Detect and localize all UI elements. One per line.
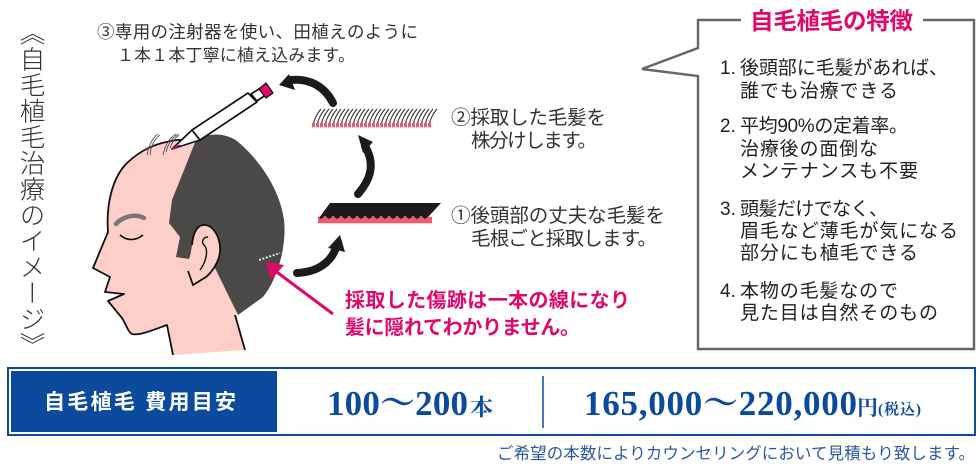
footnote: ご希望の本数によりカウンセリングにおいて見積もり致します。	[497, 444, 975, 463]
price: 165,000～220,000	[584, 384, 857, 423]
feature 1: 後頭部に毛髪があれば、	[740, 57, 948, 79]
feature 4: 見た目は自然そのもの	[740, 302, 938, 324]
features heading: 自毛植毛の特徴	[750, 8, 914, 34]
feature 3: 眉毛など薄毛が気になる	[740, 220, 958, 242]
step 1 text	[451, 205, 665, 250]
pink callout	[345, 289, 630, 339]
hair	[169, 134, 285, 315]
skin	[93, 138, 245, 355]
feature 2: 治療後の面倒な	[740, 138, 878, 160]
step 2 text	[451, 107, 606, 152]
arrow: strip to grafts	[358, 135, 373, 194]
feature 3: 部分にも植毛できる	[740, 242, 918, 264]
vertical title: 《自毛植毛治療のイメージ》	[16, 20, 44, 358]
feature 2: メンテナンスも不要	[740, 161, 918, 182]
panel: cost bar	[8, 368, 975, 435]
pink callout: 採取した傷跡は一本の線になり	[345, 289, 630, 312]
panel: features speech bubble	[642, 8, 974, 349]
arrow: scalp to strip	[297, 235, 345, 273]
step 3 text: ③専用の注射器を使い、田植えのように	[97, 22, 418, 42]
hair graft row: harvested strip	[318, 203, 441, 220]
step 1 text: ①後頭部の丈夫な毛髪を	[451, 205, 665, 227]
price: (税込)	[878, 401, 921, 418]
feature 2	[720, 115, 918, 182]
feature 4	[720, 280, 938, 324]
feature 1: 誰でも治療できる	[740, 80, 898, 102]
cost label: 自毛植毛 費用目安	[44, 391, 236, 414]
feature 4: 本物の毛髪なので	[740, 280, 898, 302]
eyebrow	[116, 216, 144, 224]
hair graft row: separated	[312, 109, 437, 125]
step 3 text: １本１本丁寧に植え込みます。	[117, 46, 355, 65]
feature 3: 3.	[720, 199, 736, 220]
step 3 text	[97, 22, 418, 65]
ear	[188, 225, 220, 285]
thin hair strands	[147, 134, 179, 155]
feature 2: 2.	[720, 116, 736, 137]
feature 3: 頭髪だけでなく、	[740, 198, 888, 220]
face outline	[93, 139, 245, 355]
feature 2: 平均90%の定着率。	[740, 115, 908, 137]
cost label	[11, 371, 277, 432]
feature 3	[720, 198, 958, 264]
illustration: head profile	[93, 134, 285, 355]
hair count: 100～200	[327, 384, 468, 423]
feature 1	[720, 57, 948, 102]
arrow: pink pointer to scar	[266, 262, 333, 314]
arrow: grafts to syringe	[279, 74, 333, 103]
icon: syringe	[172, 83, 273, 149]
price: 円	[857, 396, 878, 420]
pink callout: 髪に隠れてわかりません。	[345, 316, 580, 339]
step 2 text: ②採取した毛髪を	[451, 107, 606, 129]
hair count: 本	[470, 395, 493, 420]
closed eye	[120, 235, 143, 240]
feature 1: 1.	[720, 58, 736, 79]
step 2 text: 株分けします。	[471, 130, 597, 152]
scar line	[259, 253, 280, 260]
step 1 text: 毛根ごと採取します。	[471, 228, 657, 250]
feature 4: 4.	[720, 281, 736, 302]
